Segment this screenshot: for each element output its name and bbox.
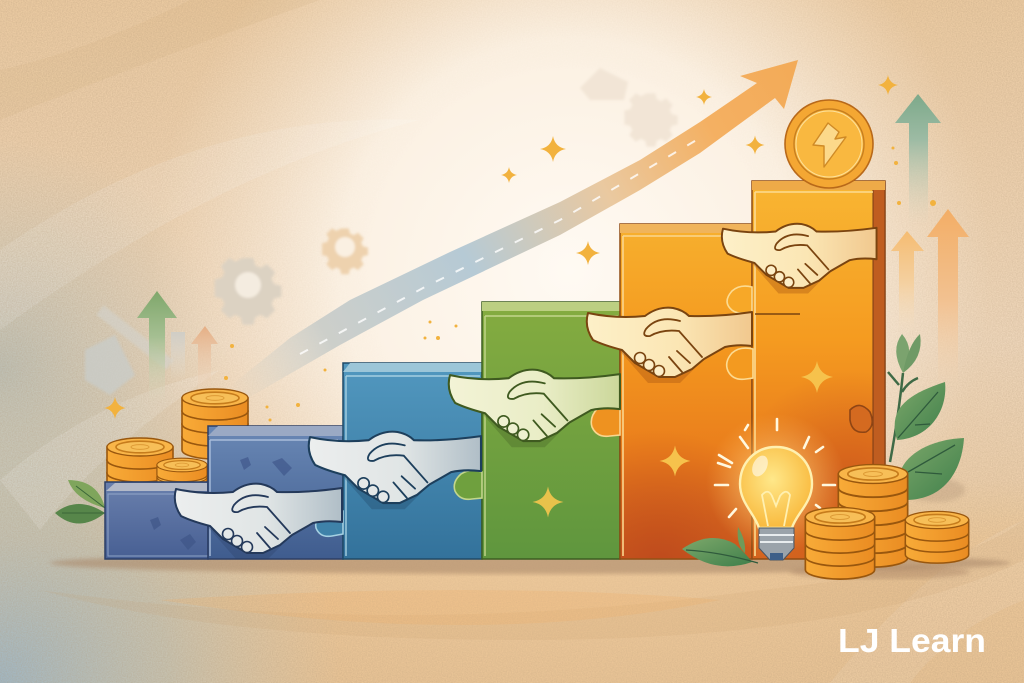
background gears and puzzle silhouettes [85,68,678,395]
sparkles background [104,75,936,422]
star on block 5 [660,446,690,476]
puzzle block 5 [591,224,752,559]
puzzle block 3 [316,363,482,559]
growth arrows left [137,291,218,405]
road arrow [228,60,798,398]
puzzle block 6 [727,181,885,559]
plant [888,334,965,502]
puzzle block 2 [208,426,343,559]
ground shadow [50,552,1010,574]
brand logo text: LJ Learn [838,622,986,659]
light bulb [706,413,846,560]
gold coin on top [785,100,873,188]
jigsaw tab lower [727,348,753,379]
left coin stacks [107,389,248,495]
right coin stacks [790,465,970,579]
handshake 2 [309,432,481,509]
jigsaw tab into block 3 [454,470,482,499]
jigsaw tab top [727,286,752,313]
left leaves [55,480,105,524]
growth arrows right [891,94,969,390]
handshake 1 [175,484,342,559]
handshake 4 [587,308,752,383]
jigsaw tab into block 4 [591,404,620,436]
star on block 6 [801,361,833,393]
puzzle staircase [105,181,885,559]
handshake 5 [722,224,877,293]
small leaf by bulb [682,527,758,566]
puzzle block 4 [454,302,620,559]
puzzle block 1 [105,482,218,559]
star on block 4 [532,486,564,518]
handshake 3 [449,370,620,447]
jigsaw tab into block 2 [316,508,343,536]
